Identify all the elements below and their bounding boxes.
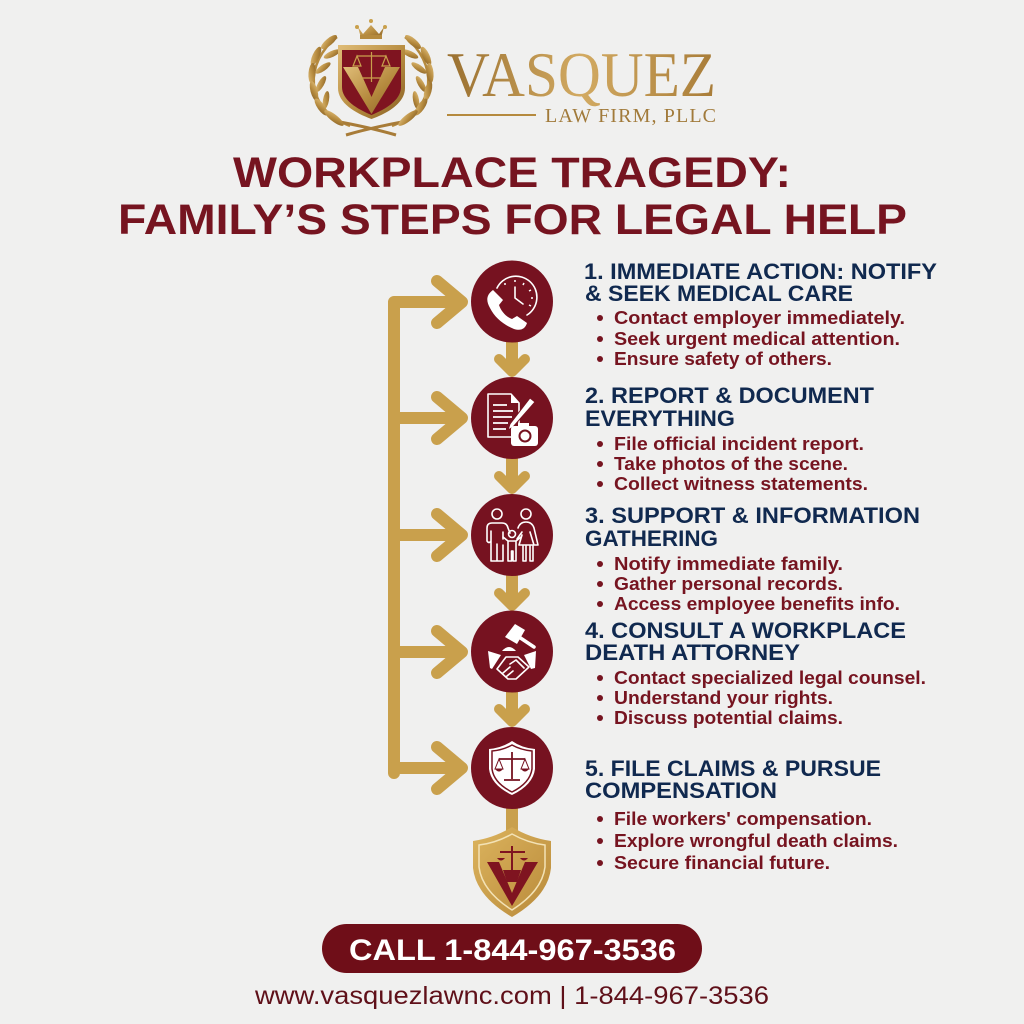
step 3 text: Notify immediate family. [614, 554, 843, 574]
step 4 text: Understand your rights. [614, 688, 833, 708]
step 2 text: Take photos of the scene. [614, 454, 848, 474]
step 2 text: Collect witness statements. [614, 474, 868, 494]
call button [322, 924, 702, 973]
step 4 text: Contact specialized legal counsel. [614, 668, 926, 688]
step 3 text [585, 503, 920, 614]
step 2 text: 2. REPORT & DOCUMENT [585, 383, 875, 408]
step 5 text: COMPENSATION [585, 778, 777, 803]
step 4 text: DEATH ATTORNEY [585, 640, 800, 665]
step 5 text: 5. FILE CLAIMS & PURSUE [585, 756, 881, 781]
step 1 text: & SEEK MEDICAL CARE [585, 281, 853, 306]
icon: crown [355, 19, 387, 39]
icon: laurel wreath [308, 33, 434, 135]
step 1 icon: phone and clock [471, 260, 553, 342]
step 1 text [584, 259, 937, 369]
step 3 text: Access employee benefits info. [614, 594, 900, 614]
logo: Vasquez Law Firm [308, 19, 716, 135]
step 5 text: File workers' compensation. [614, 809, 872, 829]
step 3 icon: family [471, 494, 553, 576]
title: WORKPLACE TRAGEDY: [233, 149, 791, 197]
firm subtitle: LAW FIRM, PLLC [545, 105, 716, 127]
step 1 text: 1. IMMEDIATE ACTION: NOTIFY [584, 259, 937, 284]
step 2 text: EVERYTHING [585, 406, 735, 431]
call button: CALL 1-844-967-3536 [349, 934, 676, 967]
step 3 text: Gather personal records. [614, 574, 843, 594]
step 4 text [585, 618, 926, 728]
step 4 text: Discuss potential claims. [614, 708, 843, 728]
step 5 text [585, 756, 898, 873]
bottom shield emblem [473, 827, 551, 917]
step 1 text: Ensure safety of others. [614, 349, 832, 369]
step 3 text: 3. SUPPORT & INFORMATION [585, 503, 920, 528]
step 5 text: Secure financial future. [614, 853, 830, 873]
step 1 text: Seek urgent medical attention. [614, 329, 900, 349]
step 5 text: Explore wrongful death claims. [614, 831, 898, 851]
step 2 icon: document, pen and camera [471, 377, 553, 459]
step 3 text: GATHERING [585, 526, 718, 551]
footer contact line: www.vasquezlawnc.com | 1-844-967-3536 [254, 982, 769, 1010]
step 4 text: 4. CONSULT A WORKPLACE [585, 618, 906, 643]
title [118, 149, 907, 244]
icon: logo shield [338, 45, 405, 119]
firm name: VASQUEZ [447, 39, 716, 110]
step 2 text [585, 383, 875, 494]
step 1 text: Contact employer immediately. [614, 308, 905, 328]
step 4 icon: gavel and handshake [471, 610, 553, 692]
title: FAMILY’S STEPS FOR LEGAL HELP [118, 196, 907, 244]
step 2 text: File official incident report. [614, 434, 864, 454]
flow arrows [394, 281, 525, 835]
step 5 icon: scales shield [471, 727, 553, 809]
